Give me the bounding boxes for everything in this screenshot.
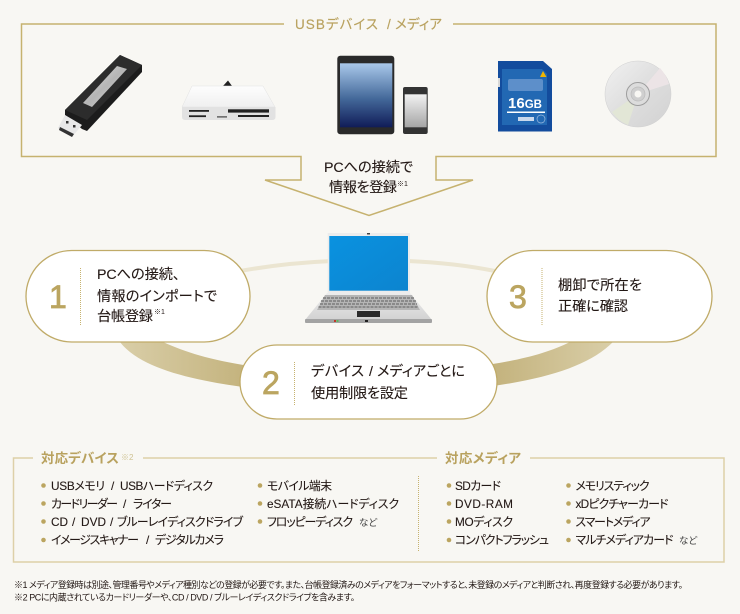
list: supported devices column 1: CD bbox=[51, 515, 68, 529]
list: supported media column 2: など bbox=[679, 536, 698, 547]
list: supported devices column 1: / bbox=[72, 515, 76, 529]
icon: SD card 16GB bbox=[498, 61, 552, 132]
heading: supported media: 対応メディア bbox=[445, 450, 521, 466]
icon: smartphone bbox=[403, 87, 428, 134]
text: register by connecting to PC: 情報を登録 bbox=[329, 180, 397, 196]
step number 2: 2 bbox=[262, 365, 280, 401]
step 2 text: 使用制限を設定 bbox=[311, 385, 408, 402]
text: register by connecting to PC: ※1 bbox=[397, 180, 408, 188]
text: register by connecting to PC: PCへの接続で bbox=[324, 159, 413, 176]
step 2 text: メディアごとに bbox=[377, 363, 465, 380]
list: supported devices column 1 bbox=[41, 479, 244, 547]
list: supported devices column 1: USBハードディスク bbox=[120, 479, 213, 493]
panel: supported devices and media frame bbox=[14, 450, 724, 562]
icon: card reader bbox=[182, 80, 276, 120]
list: supported devices column 1: ライター bbox=[133, 497, 172, 511]
list: supported devices column 2 bbox=[258, 479, 399, 529]
list: supported devices column 2: など bbox=[359, 518, 378, 529]
list: supported media column 1: コンパクトフラッシュ bbox=[455, 533, 549, 547]
list: supported devices column 1: / bbox=[110, 515, 114, 529]
text: register by connecting to PC bbox=[324, 159, 413, 196]
list: supported media column 2: スマートメディア bbox=[576, 515, 650, 529]
footnotes: ※2 PCに内蔵されているカードリーダーや、CD / DVD / ブルーレイディスクドライブを含みます。 bbox=[14, 592, 355, 602]
step 1 text bbox=[97, 266, 217, 325]
step 3 text bbox=[558, 278, 642, 315]
list: supported media column 2: マルチメディアカード bbox=[576, 533, 674, 547]
footnotes: ※1 メディア登録時は別途、管理番号やメディア種別などの登録が必要です。また、台帳登録済みのメディアをフォーマットすると、未登録のメディアと判断され、再度登録する必要があります。 bbox=[14, 579, 683, 590]
arcs linking PC and steps bbox=[120, 261, 613, 388]
list: supported devices column 1: DVD bbox=[81, 515, 106, 529]
list: supported devices column 1: / bbox=[123, 497, 127, 511]
icon: laptop bbox=[305, 233, 432, 323]
step 2 text: / bbox=[369, 364, 373, 380]
step 3 pill bbox=[487, 250, 712, 342]
list: supported devices column 1: カードリーダー bbox=[51, 497, 118, 511]
list: supported media column 2: xDピクチャーカード bbox=[576, 497, 669, 511]
list: supported media column 1 bbox=[447, 479, 549, 547]
list: supported media column 1: MOディスク bbox=[455, 515, 513, 529]
step 1 text: 台帳登録 bbox=[97, 309, 153, 325]
icon: tablet bbox=[337, 56, 394, 134]
heading: USB devices / media: / bbox=[387, 17, 391, 32]
icon: SD card 16GB: 16GB bbox=[508, 95, 542, 112]
step 2 text bbox=[311, 363, 465, 402]
step 1 text: PCへの接続、 bbox=[97, 266, 180, 283]
step 3 text: 棚卸で所在を bbox=[558, 278, 642, 294]
list: supported devices column 1: / bbox=[146, 533, 150, 547]
step 3 text: 正確に確認 bbox=[558, 299, 628, 315]
heading: USB devices / media bbox=[295, 16, 442, 32]
list: supported devices column 2: モバイル端末 bbox=[267, 479, 332, 493]
list: supported devices column 2: フロッピーディスク bbox=[267, 515, 353, 529]
list: supported devices column 1: ブルーレイディスクドライブ bbox=[117, 515, 244, 529]
step 2 text: デバイス bbox=[311, 363, 364, 380]
list: supported media column 2: メモリスティック bbox=[576, 479, 650, 493]
list: supported devices column 1: / bbox=[111, 479, 115, 493]
step 1 text: ※1 bbox=[154, 308, 165, 316]
step 1 pill bbox=[26, 250, 250, 342]
list: supported media column 1: DVD-RAM bbox=[455, 497, 513, 511]
icon: USB memory stick bbox=[58, 55, 142, 137]
list: supported devices column 1: USBメモリ bbox=[51, 479, 105, 493]
step number 1: 1 bbox=[49, 279, 67, 315]
list: supported devices column 1: デジタルカメラ bbox=[155, 533, 224, 547]
list: supported media column 2 bbox=[566, 479, 698, 547]
step 1 text: 情報のインポートで bbox=[97, 289, 217, 305]
heading: supported devices: 対応デバイス bbox=[41, 450, 119, 466]
heading: supported devices: ※2 bbox=[121, 453, 134, 462]
heading: USB devices / media: USBデバイス bbox=[295, 16, 378, 32]
step number 3: 3 bbox=[509, 279, 527, 315]
list: supported devices column 2: eSATA接続ハードディスク bbox=[267, 497, 399, 511]
step 2 pill bbox=[240, 345, 497, 419]
panel: USB devices / media frame with arrow bbox=[22, 16, 716, 216]
icon: optical disc bbox=[605, 61, 671, 127]
list: supported media column 1: SDカード bbox=[455, 479, 501, 493]
heading: USB devices / media: メディア bbox=[395, 16, 442, 32]
footnotes bbox=[14, 579, 683, 602]
list: supported devices column 1: イメージスキャナー bbox=[51, 533, 139, 547]
